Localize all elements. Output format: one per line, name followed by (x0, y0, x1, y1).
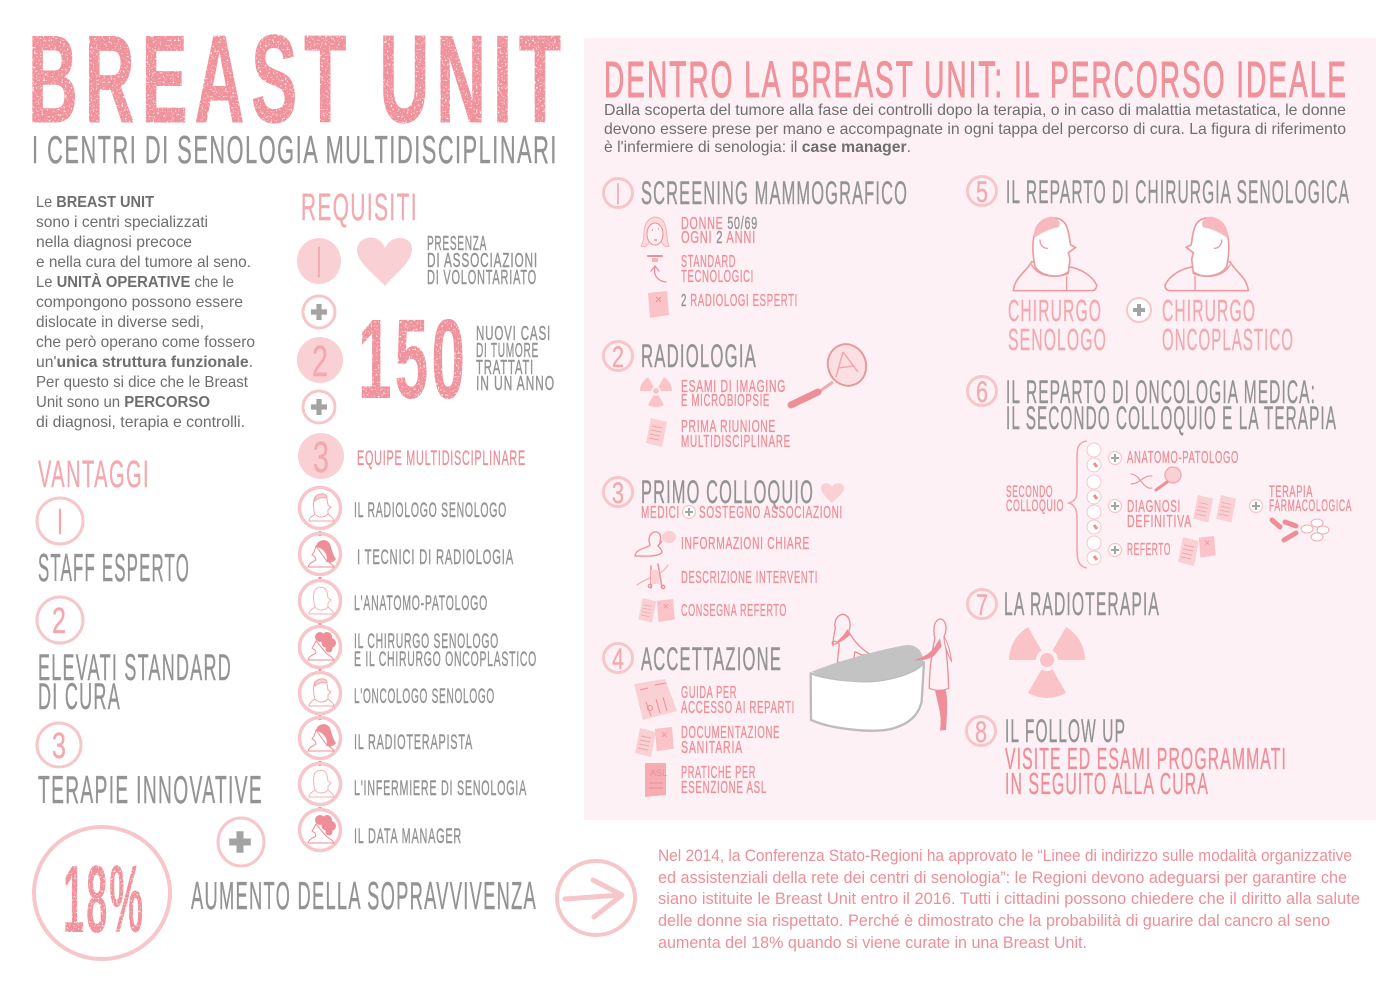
illustration: surgeon right (1165, 217, 1248, 291)
text: radiologi: 2 RADIOLOGI ESPERTI (681, 290, 798, 310)
team: radiologo (300, 488, 507, 528)
label: chirurgo senologo: SENOLOGO (1008, 322, 1107, 357)
number 4: 4 (612, 643, 624, 676)
illustration: surgeon left (1013, 217, 1097, 291)
text: descrizione interventi: DESCRIZIONE INTERVENTI (681, 567, 818, 587)
text: esami: E MICROBIOPSIE (681, 390, 770, 410)
icon: dna and magnifier (1131, 467, 1181, 490)
text: nuovi casi: NUOVI CASI (476, 323, 551, 345)
text: consegna referto: CONSEGNA REFERTO (681, 600, 787, 620)
icon: scissors (637, 564, 668, 589)
text: riunione: PRIMA RIUNIONE (681, 416, 776, 436)
team: data manager (300, 810, 462, 850)
step 3: primo colloquio (604, 474, 844, 623)
panel: requisiti: IL RADIOLOGO SENOLOGO (354, 499, 507, 522)
vantaggio 1: I (57, 501, 63, 542)
icon: guide (634, 679, 677, 720)
team: radioterapista (300, 718, 473, 758)
heading: PRIMO COLLOQUIO (641, 474, 814, 510)
text: informazioni chiare: INFORMAZIONI CHIARE (681, 533, 810, 553)
icon: heart (821, 483, 844, 503)
step 2: radiologia (604, 338, 872, 451)
intro text block: sono i centri specializzati (36, 214, 208, 231)
label: chirurgo oncoplastico (1162, 293, 1294, 357)
intro text block: e nella cura del tumore al seno. (36, 254, 251, 271)
step 7: radioterapia (968, 586, 1160, 698)
number 6: 6 (976, 376, 988, 409)
icon: ASL form (645, 763, 667, 797)
requisito 2 badge (297, 337, 343, 386)
team: radioterapista: IL RADIOTERAPISTA (354, 731, 473, 754)
number 7 (968, 589, 996, 622)
team: tecnici (300, 534, 514, 574)
number 3: 3 (612, 477, 624, 510)
icon: plus (218, 818, 264, 866)
team: infermiere (300, 764, 527, 804)
subtitle: I CENTRI DI SENOLOGIA MULTIDISCIPLINARI (32, 129, 558, 172)
icon: pills (1272, 519, 1329, 541)
team: anatomo-patologo: L'ANATOMO-PATOLOGO (354, 592, 488, 615)
label: chirurgo senologo (1008, 293, 1107, 357)
intro text block: un'unica struttura funzionale. (36, 354, 253, 371)
panel: requisiti: L'ONCOLOGO SENOLOGO (354, 685, 495, 708)
icon: radiation (638, 376, 674, 407)
intro text block: Per questo si dice che le Breast (36, 374, 249, 391)
panel: percorso background (584, 38, 1376, 820)
closing paragraph: Nel 2014, la Conferenza Stato-Regioni ha approvato le “Linee di indirizzo sulle modalità organizzative (658, 847, 1352, 865)
number 5 (968, 176, 996, 209)
text: guida: GUIDA PER (681, 682, 737, 702)
text: medici sostegno (641, 502, 843, 522)
text: documentazione: DOCUMENTAZIONE (681, 722, 780, 742)
panel: requisiti: E IL CHIRURGO ONCOPLASTICO (354, 648, 537, 671)
item: referto (1108, 539, 1171, 559)
icon: woman (641, 217, 669, 247)
text: documentazione: SANITARIA (681, 737, 743, 757)
percorso intro paragraph (604, 102, 1346, 156)
team: oncologo (300, 672, 495, 714)
vantaggio 3 (37, 723, 263, 812)
text: nuovi casi: IN UN ANNO (476, 373, 555, 395)
team: chirurghi (300, 626, 537, 671)
team: data manager: IL DATA MANAGER (354, 825, 462, 848)
icon: arrow (557, 861, 635, 935)
requisito 2 badge: 2 (312, 337, 328, 386)
step 6: oncologia (968, 374, 1352, 568)
text: guida (681, 682, 795, 717)
item: anatomo-patologo (1108, 447, 1239, 467)
text: standard: TECNOLOGICI (681, 266, 754, 286)
team: anatomo-patologo (300, 580, 488, 622)
text: nuovi casi: DI TUMORE (476, 340, 539, 362)
intro text block: nella diagnosi precoce (36, 234, 192, 251)
brace (1069, 441, 1087, 568)
percorso intro paragraph: devono essere prese per mano e accompagnate in ogni tappa del percorso di cura. La figura di riferimento (604, 121, 1346, 138)
number 7: 7 (976, 589, 988, 622)
vantaggio 2 (37, 597, 232, 717)
text: medici sostegno: SOSTEGNO ASSOCIAZIONI (699, 502, 843, 522)
heading: RADIOLOGIA (641, 338, 757, 374)
percorso intro paragraph: è l'infermiere di senologia: il case manager. (604, 139, 911, 156)
stat: 150: 150 (358, 296, 468, 422)
text: presenza associazioni: DI VOLONTARIATO (427, 267, 537, 289)
text: nuovi casi: TRATTATI (476, 357, 534, 379)
text: pratiche: ESENZIONE ASL (681, 777, 767, 797)
step 8: follow up (966, 713, 1287, 801)
item: diagnosi definitiva: DIAGNOSI (1127, 496, 1181, 516)
item: terapia farmacologica (1250, 483, 1352, 515)
team: tecnici: I TECNICI DI RADIOLOGIA (357, 546, 514, 569)
step 6: oncologia: REFERTO (1127, 539, 1171, 559)
vantaggio 3: 3 (52, 725, 66, 766)
team: infermiere: L'INFERMIERE DI SENOLOGIA (354, 777, 527, 800)
intro text block: Le UNITÀ OPERATIVE che le (36, 272, 234, 291)
text: presenza associazioni: DI ASSOCIAZIONI (427, 250, 538, 272)
step 1: screening (604, 175, 908, 318)
number 3 (604, 477, 632, 510)
stat: 18%: 18% (63, 846, 145, 953)
text: donne: OGNI 2 ANNI (681, 227, 756, 247)
text: documentazione (681, 722, 780, 757)
icon: heart (357, 238, 412, 286)
label: chirurgo oncoplastico: CHIRURGO (1162, 293, 1256, 328)
number 4 (604, 643, 632, 676)
panel: requisiti (297, 187, 555, 850)
icon: plus (303, 391, 335, 423)
team mini avatars (1087, 443, 1101, 565)
icon: reports (1193, 495, 1236, 523)
icon: report and radiography (1178, 536, 1216, 566)
step 8: follow up: IL FOLLOW UP (1005, 713, 1126, 749)
title: BREAST UNIT (28, 11, 568, 149)
icon: ASL form: ASL (650, 768, 667, 778)
text: riunione (681, 416, 791, 451)
item: diagnosi definitiva (1108, 496, 1192, 531)
intro text block: che però operano come fossero (36, 334, 255, 351)
text: visite programmate: IN SEGUITO ALLA CURA (1005, 766, 1209, 801)
closing paragraph: aumenta del 18% quando si viene curate in una Breast Unit. (658, 934, 1087, 952)
requisito 3 badge: 3 (313, 433, 329, 482)
number 6 (968, 376, 996, 409)
icon: document (646, 418, 667, 447)
text: secondo colloquio: SECONDO (1006, 483, 1053, 501)
step 4: accettazione (604, 614, 952, 797)
item: anatomo-patologo: ANATOMO-PATOLOGO (1127, 447, 1239, 467)
number 2: 2 (612, 341, 624, 374)
panel: vantaggi (37, 454, 263, 812)
item: terapia farmacologica: TERAPIA (1269, 483, 1313, 501)
text: equipe multidisciplinare: EQUIPE MULTIDISCIPLINARE (357, 447, 526, 470)
text: secondo colloquio (1006, 483, 1064, 515)
text: guida: ACCESSO AI REPARTI (681, 697, 795, 717)
percorso intro paragraph: Dalla scoperta del tumore alla fase dei controlli dopo la terapia, o in caso di malattia metastatica, le donne (604, 102, 1346, 119)
intro text block: compongono possono essere (36, 294, 243, 311)
step 5: chirurgia (968, 174, 1350, 357)
closing paragraph (658, 847, 1360, 952)
heading: ACCETTAZIONE (641, 641, 782, 677)
closing paragraph: delle donne sia rispettato. Perché è dimostrato che la probabilità di guarire dal cancro al seno (658, 912, 1330, 930)
text: pratiche (681, 762, 767, 797)
icon: plus (303, 296, 335, 328)
icon: person and speech bubble (635, 531, 676, 556)
team: chirurghi: IL CHIRURGO SENOLOGO (354, 630, 499, 653)
intro text block: Unit sono un PERCORSO (36, 394, 210, 411)
number 8: 8 (975, 716, 987, 749)
heading (1006, 374, 1337, 436)
closing paragraph: siano istituite le Breast Unit entro il 2016. Tutti i cittadini possono chiedere che il diritto alla salute (658, 890, 1360, 908)
icon: standard (648, 256, 666, 282)
icon: plus (1127, 298, 1151, 322)
number 5: 5 (976, 176, 988, 209)
text: standard (681, 251, 754, 286)
infographic: LA RADIOTERAPIA (1004, 586, 1160, 622)
connector between team avatars (318, 530, 322, 808)
intro text block: dislocate in diverse sedi, (36, 314, 204, 331)
label: chirurgo senologo: CHIRURGO (1008, 293, 1102, 328)
number 1: I (616, 178, 620, 211)
closing paragraph: ed assistenziali della rete dei centri di senologia”: le Regioni devono adeguarsi per garantire che (658, 869, 1347, 887)
item: diagnosi definitiva: DEFINITIVA (1127, 511, 1192, 531)
vantaggio 1 (37, 498, 190, 590)
text: donne (681, 213, 758, 247)
text: secondo colloquio: COLLOQUIO (1006, 497, 1064, 515)
vantaggio 2: DI CURA (38, 676, 121, 717)
icon: magnifier (791, 339, 872, 405)
heading: vantaggi: VANTAGGI (38, 454, 150, 496)
heading: requisiti: REQUISITI (301, 187, 418, 229)
intro text block: Le BREAST UNIT (36, 194, 154, 211)
text: riunione: MULTIDISCIPLINARE (681, 431, 791, 451)
number 1 (604, 178, 632, 211)
icon: documents (638, 598, 675, 623)
text: pratiche: PRATICHE PER (681, 762, 756, 782)
text: visite programmate (1005, 741, 1287, 801)
text: medici sostegno: MEDICI (641, 502, 680, 522)
intro text block (36, 194, 255, 431)
icon: radiography (648, 291, 669, 318)
text: presenza associazioni: PRESENZA (427, 233, 487, 255)
vantaggio 2: 2 (52, 600, 66, 641)
number 2 (604, 341, 632, 374)
text: esami: ESAMI DI IMAGING (681, 376, 786, 396)
intro text block: di diagnosi, terapia e controlli. (36, 414, 245, 431)
panel: vantaggi: ELEVATI STANDARD (38, 647, 232, 688)
text: esami (681, 376, 786, 410)
text: nuovi casi (476, 323, 555, 395)
requisito 3 badge (298, 433, 344, 482)
stat: 18% (34, 827, 170, 959)
requisito 1 badge (297, 238, 341, 287)
illustration: reception desk (811, 614, 952, 731)
panel: vantaggi: STAFF ESPERTO (38, 547, 190, 590)
text: donne: DONNE 50/69 (681, 213, 758, 233)
heading: SCREENING MAMMOGRAFICO (641, 175, 908, 211)
infographic: TERAPIE INNOVATIVE (38, 769, 263, 812)
icon: radiation (1005, 625, 1089, 698)
requisito 1 badge: I (316, 238, 322, 287)
text: standard: STANDARD (681, 251, 736, 271)
infographic: AUMENTO DELLA SOPRAVVIVENZA (191, 875, 537, 918)
icon: documents (635, 727, 674, 757)
text: presenza associazioni (427, 233, 538, 289)
number 8 (966, 716, 996, 749)
